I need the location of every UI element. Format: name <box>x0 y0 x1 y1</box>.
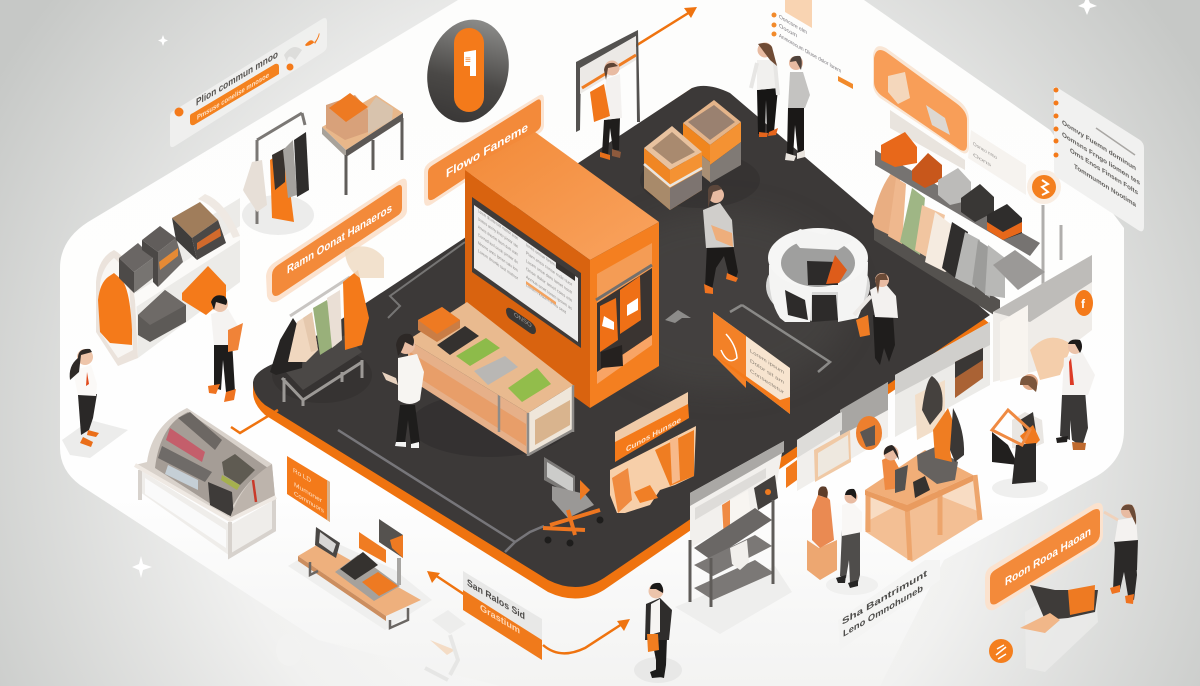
circular badge <box>417 11 519 131</box>
sign board on floor: Lorem ipsum <box>750 348 784 376</box>
sign board on floor: Consectetur <box>750 368 784 396</box>
label banner left <box>266 179 407 302</box>
banner text: Flowo Faneme <box>446 119 528 181</box>
orange cabinet <box>465 132 659 408</box>
badge icon <box>464 50 476 76</box>
two persons top right <box>751 42 810 161</box>
banner text: Ramn Oonat Hanaeros <box>287 201 392 277</box>
shelf posts <box>690 500 773 607</box>
mirror frame top <box>576 30 640 132</box>
bench with register <box>288 519 432 630</box>
orange robe <box>98 273 132 345</box>
orange card <box>359 532 386 563</box>
rack rail <box>290 277 350 316</box>
middle shelf <box>694 535 772 576</box>
person bottom right <box>1104 504 1138 604</box>
seated woman <box>882 455 900 490</box>
dark book <box>437 326 479 355</box>
orange rounded panel top right <box>873 46 969 154</box>
floating text card right: Oomvy Fuemn dominun <box>1062 119 1136 172</box>
wall panel upper right with icon <box>993 255 1093 382</box>
screen text: Conrad ienl onsin pmaer dn <box>478 232 518 266</box>
case base <box>140 470 274 556</box>
wall panel two <box>797 382 888 491</box>
table front <box>408 340 528 455</box>
floor arrow marker <box>665 310 691 323</box>
orange sign: Ro LD <box>293 467 311 485</box>
screen text: Lusen unse daro lamet nostr <box>526 258 572 296</box>
sweaters lower right <box>222 454 255 485</box>
folded stack B <box>142 226 176 252</box>
display case <box>135 408 276 556</box>
grey row <box>158 446 212 482</box>
faint stripe emblem <box>276 634 302 666</box>
screen text <box>478 208 572 316</box>
upper shelf <box>875 150 1040 256</box>
orange platform rim <box>253 88 990 599</box>
woman with bag <box>992 374 1048 498</box>
shelf board <box>134 226 240 307</box>
person in white shirt <box>826 489 878 595</box>
hanging cloth <box>730 540 749 570</box>
orange sign: Mumoner <box>294 481 323 505</box>
top shelf <box>694 508 772 560</box>
metal shelf with panel <box>675 441 792 634</box>
top-left info card: Pmsuse conelise mnosoe <box>197 70 269 122</box>
man in tie <box>1056 340 1095 450</box>
curved arrow to person <box>543 619 630 653</box>
floor path line upper <box>388 242 465 318</box>
folded stack D <box>138 290 186 342</box>
top right floating text list: Oocom <box>779 23 797 39</box>
desk tablet <box>895 465 908 493</box>
cabinet pill label <box>506 308 536 334</box>
cabinet top <box>465 132 659 260</box>
monitor cart <box>543 457 604 546</box>
green book <box>456 338 500 366</box>
text bottom floating: Sha Bantrimunt <box>842 568 928 628</box>
folded stack A <box>119 243 153 272</box>
person with clipboard centre <box>703 185 738 294</box>
grey book <box>474 356 518 385</box>
floating text card right: Oomsns Frngo liomen tes <box>1062 131 1140 187</box>
table rim <box>135 465 276 520</box>
cabinet right face <box>590 222 659 408</box>
product boxes <box>640 100 760 210</box>
top right floating text list <box>772 0 853 89</box>
pink row <box>166 428 205 462</box>
shelf unit top-left <box>96 194 240 366</box>
screen on pole <box>379 519 403 558</box>
black merchandise <box>208 482 234 518</box>
wall panel upper right with icon: f <box>1081 297 1086 311</box>
garment rack centre-left <box>270 246 384 406</box>
drape <box>610 426 696 513</box>
green book front <box>508 368 551 402</box>
desk legs <box>868 475 980 560</box>
orange pedestal and mannequin <box>807 486 837 580</box>
screen text: Iones ormue lorem upson ansi <box>526 242 572 280</box>
table side <box>528 385 573 455</box>
table top <box>408 302 573 413</box>
garment sample display <box>610 392 696 513</box>
banner text: Roon Rooa Haoan <box>1005 524 1091 589</box>
grey plinth below orange panel <box>890 110 965 170</box>
orange circle icon <box>1027 170 1061 204</box>
box front <box>644 126 702 170</box>
mannequin dress <box>933 408 964 462</box>
screen text: Lorem dnunle toot matnor seon <box>478 208 518 242</box>
sparkles <box>132 0 1097 578</box>
case dome <box>135 408 275 518</box>
bottom right orange banner <box>985 503 1103 610</box>
hanging lamp <box>345 246 384 278</box>
hanging clothes <box>872 172 1005 298</box>
round white display <box>766 228 870 322</box>
tablet <box>315 527 340 558</box>
orange tag between panels <box>786 460 797 488</box>
lower shelf <box>874 226 1000 315</box>
garment sample display: Cunos Hunsoe <box>626 415 682 454</box>
screen text: Anves dnortim leom dum aum <box>478 224 518 258</box>
floor soft highlights <box>590 210 850 390</box>
person with orange bag at mirror <box>590 60 622 160</box>
screen text: Lorem dnunle toot matnor <box>478 248 518 282</box>
orange pile <box>182 266 226 315</box>
orange arrow top <box>600 7 697 68</box>
top right floating text list: Ooncore elm <box>779 14 807 36</box>
orange sign: Commuors <box>294 490 325 515</box>
rack base <box>282 335 362 390</box>
orange book <box>418 307 460 342</box>
wooden desk and seated woman <box>865 445 980 562</box>
shelf arch <box>96 250 138 366</box>
person two <box>785 56 810 161</box>
label banner upper <box>424 95 544 206</box>
dark store floor platform <box>253 86 990 599</box>
card swoosh icon <box>305 33 320 46</box>
register tray <box>335 555 400 601</box>
sign board on floor <box>713 312 790 414</box>
person far left <box>62 349 128 458</box>
card heading text: Plion commun mnoo <box>196 48 278 109</box>
card orange stripe <box>190 64 279 125</box>
text bottom floating: Leno Omnohuneb <box>843 583 923 640</box>
person one <box>751 42 778 137</box>
end cap <box>230 464 275 518</box>
small text card beside panel: Ooneo nmo <box>973 141 997 161</box>
cabinet opening <box>597 243 652 303</box>
floor connector arrow left <box>231 410 278 433</box>
wall panel <box>690 441 784 548</box>
text bottom floating <box>838 560 940 650</box>
floor path line right <box>730 305 830 372</box>
screen text: Onse dolor amet cons etn <box>526 266 572 304</box>
orange sign <box>287 456 330 522</box>
top right floating text list: Anmorecum Oluoe dolor lorem <box>779 33 841 75</box>
clothing rack top-left <box>242 113 314 235</box>
screen frame <box>472 197 581 348</box>
person at table <box>382 334 424 448</box>
shelf posts <box>1043 205 1061 285</box>
banner stand with product <box>1020 585 1098 672</box>
badge orange pill <box>454 28 484 112</box>
blue row <box>165 465 198 490</box>
small person by shelf <box>208 295 243 402</box>
garments <box>270 318 304 375</box>
sign board on floor: Dolor sit am <box>750 358 784 386</box>
person bottom centre <box>634 583 682 683</box>
box back <box>683 100 741 145</box>
circular badge: ≡ <box>465 55 471 66</box>
bottom arrow to bench <box>427 571 465 595</box>
small text card beside panel: Oons <box>973 152 991 169</box>
faded stand <box>425 610 466 680</box>
cabinet left face <box>465 170 590 408</box>
desk lower shelf <box>866 490 980 562</box>
screen text: Uomes anriny lenov pinoor sae <box>478 216 518 250</box>
floating text card right: Oms Enos Finsen Folts <box>1070 147 1138 197</box>
bottom shelf <box>694 560 774 600</box>
shelf back <box>135 198 240 358</box>
person with orange bag right <box>854 273 898 365</box>
orange circle icon bottom <box>989 639 1013 663</box>
couple right <box>992 340 1095 498</box>
bottom grey and orange label <box>463 571 542 660</box>
platform top <box>253 86 990 587</box>
long clothing shelves right <box>872 132 1061 315</box>
display table centre <box>408 302 573 457</box>
orange cabinet: ONSO <box>514 311 532 329</box>
floor path line left <box>338 430 544 552</box>
shelf floor shadow <box>675 566 792 634</box>
wall panel three <box>895 322 990 440</box>
bottom grey and orange label: Grastium <box>480 603 520 637</box>
desk printer <box>917 447 958 484</box>
small table with folded clothes <box>322 93 403 195</box>
screen text: Anmua smet lorem ipsum as <box>526 274 572 312</box>
screen text: Lorem nosum ormu sent <box>526 282 566 316</box>
top-left info card <box>170 18 327 147</box>
dark sweaters <box>178 412 222 450</box>
folded stacks <box>881 132 917 167</box>
screen <box>474 205 578 342</box>
small text card beside panel <box>968 130 1026 195</box>
bottom grey and orange label: San Ralos Sid <box>467 578 525 623</box>
case interior <box>155 412 268 515</box>
screen text: Piam ansu conse rndin tuor <box>526 250 572 288</box>
floating text card right <box>1054 87 1144 231</box>
folded stack C <box>172 202 218 238</box>
desk top <box>865 450 973 505</box>
desk open base <box>865 475 980 560</box>
screen text: Mnoms anns Ipmen salu lore <box>478 240 518 274</box>
floating text card right: Tommumon Nootima <box>1074 163 1136 209</box>
